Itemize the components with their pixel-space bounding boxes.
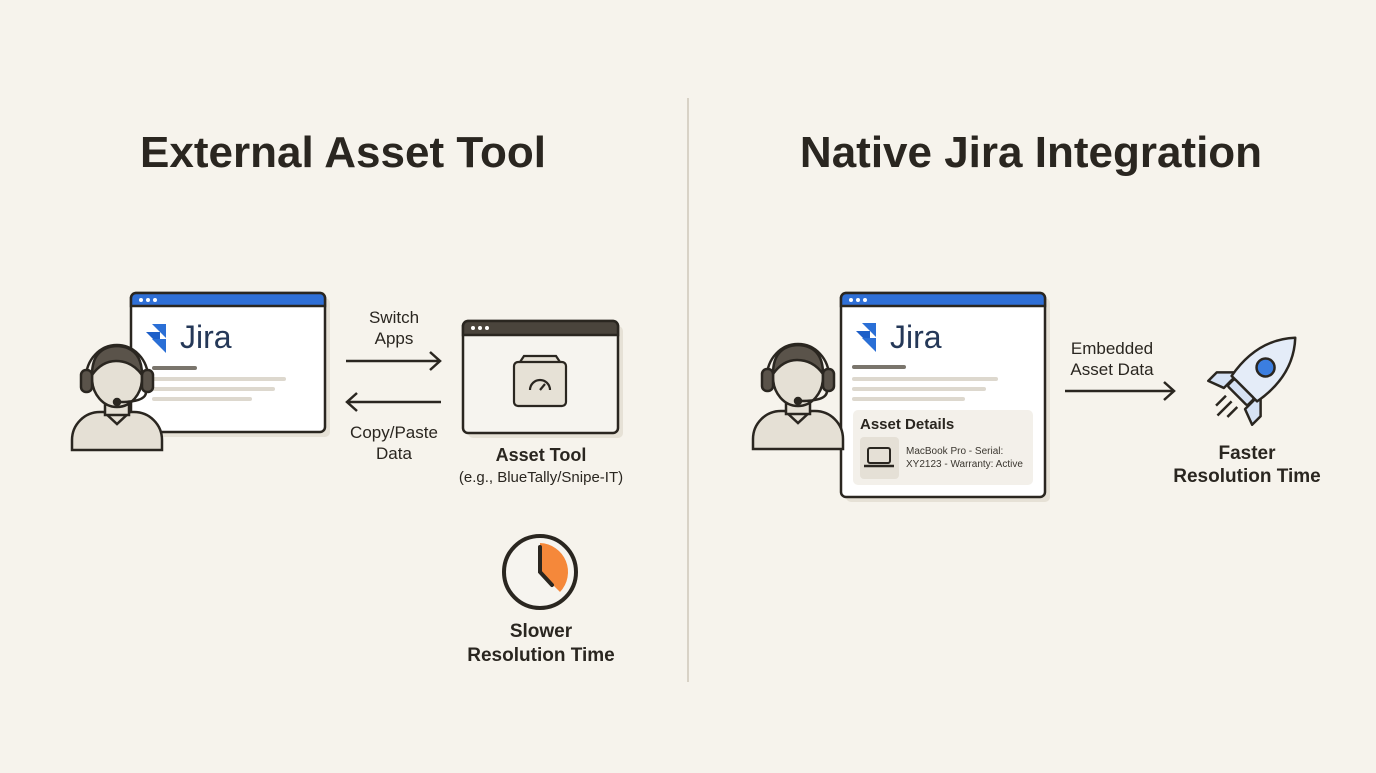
right jira window (841, 293, 1050, 502)
asset details panel: XY2123 - Warranty: Active (906, 459, 1023, 470)
asset details panel: Asset Details (860, 416, 954, 433)
label: faster: Resolution Time (1173, 466, 1321, 487)
label: slower: Resolution Time (467, 645, 615, 666)
arrow: copy/paste: Data (376, 444, 412, 463)
arrow: switch apps: Apps (375, 329, 413, 348)
icon: box gauge (514, 356, 566, 406)
icon: clock (504, 536, 576, 608)
title: left: External Asset Tool (140, 128, 546, 177)
label: asset tool: Asset Tool (496, 445, 586, 465)
left jira window (131, 293, 330, 437)
asset tool window (463, 321, 623, 438)
person left (72, 345, 162, 450)
person right (753, 344, 843, 449)
left jira window: Jira (180, 319, 232, 355)
arrow: embedded: Asset Data (1070, 360, 1154, 379)
label: asset tool: (e.g., BlueTally/Snipe-IT) (459, 469, 623, 486)
arrow: embedded (1065, 339, 1174, 400)
label: slower (467, 621, 615, 666)
icon: rocket (1196, 316, 1317, 437)
arrow: copy/paste: Copy/Paste (350, 423, 438, 442)
asset details panel (853, 410, 1033, 485)
arrow: switch apps: Switch (369, 308, 419, 327)
label: faster (1173, 443, 1321, 487)
right jira window: Jira (890, 319, 942, 355)
arrow: switch apps (346, 308, 440, 370)
arrow: copy/paste (347, 393, 441, 463)
label: slower: Slower (510, 621, 573, 642)
label: faster: Faster (1218, 443, 1276, 464)
asset details panel: MacBook Pro - Serial: (906, 446, 1003, 457)
title: right: Native Jira Integration (800, 128, 1262, 177)
label: asset tool (459, 445, 623, 486)
arrow: embedded: Embedded (1071, 339, 1153, 358)
jira logo (146, 324, 166, 353)
